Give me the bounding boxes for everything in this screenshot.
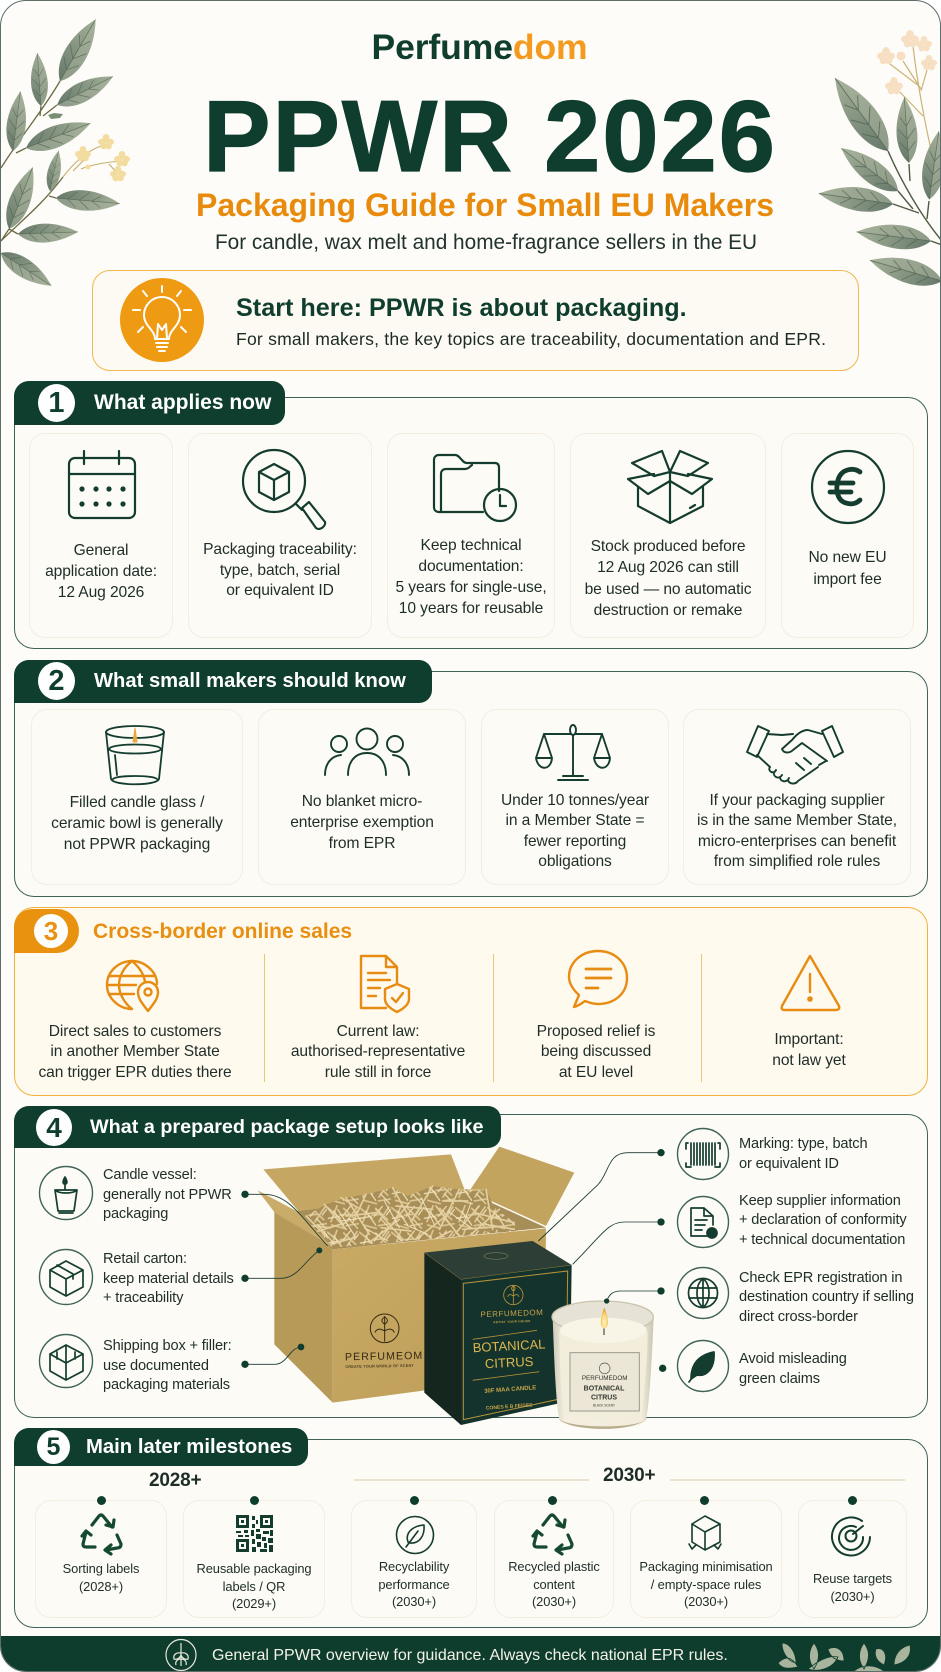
text: proposed relief: at EU level bbox=[559, 1064, 633, 1081]
text: current law bbox=[291, 1023, 465, 1081]
icon: leaf in circle bbox=[396, 1516, 434, 1554]
retail carton: 30F MAA CANDLE bbox=[484, 1385, 536, 1395]
card text: destruction or remake bbox=[594, 602, 742, 619]
card text: Reusable packaging bbox=[196, 1561, 312, 1576]
icon: document check bbox=[677, 1196, 729, 1248]
icon: people bbox=[324, 728, 410, 776]
title: PPWR 2026 bbox=[203, 81, 777, 193]
card text: Filled candle glass / bbox=[70, 794, 204, 811]
card text: No new EU bbox=[809, 549, 886, 566]
text: green claims bbox=[739, 1350, 847, 1389]
label 2028+: 2028+ bbox=[149, 1470, 201, 1491]
icon: document with shield bbox=[360, 954, 410, 1014]
heading text: What small makers should know bbox=[94, 670, 406, 692]
panel 5: later milestones bbox=[14, 1428, 928, 1628]
text: proposed relief bbox=[537, 1023, 655, 1081]
card text: (2030+) bbox=[830, 1589, 875, 1604]
section heading 3 bbox=[14, 909, 79, 953]
product photo: box, carton, candle and leader lines bbox=[241, 1146, 666, 1429]
retail carton: BOTANICAL bbox=[472, 1336, 546, 1355]
shipping box bbox=[258, 1147, 574, 1403]
card text: (2028+) bbox=[79, 1579, 123, 1594]
retail carton: ARTIST YOUR HOUSE bbox=[493, 1319, 531, 1324]
card text bbox=[290, 793, 434, 852]
text: EPR registration bbox=[739, 1269, 914, 1327]
icon: euro bbox=[810, 450, 886, 524]
icon: candle glass bbox=[105, 725, 165, 786]
text: current law: rule still in force bbox=[325, 1064, 431, 1081]
card text bbox=[697, 792, 897, 870]
retail carton: CITRUS bbox=[485, 1354, 534, 1371]
card text: is in the same Member State, bbox=[697, 812, 897, 829]
text: direct sales: in another Member State bbox=[50, 1043, 220, 1060]
card text: Recycled plastic bbox=[508, 1559, 600, 1574]
retail carton: PERFUMEDOM bbox=[480, 1308, 543, 1319]
card text: (2029+) bbox=[232, 1596, 276, 1611]
card text bbox=[45, 542, 157, 601]
text: supplier information: Keep supplier information bbox=[739, 1193, 901, 1209]
card: existing stock bbox=[570, 433, 766, 638]
icon: globe with pin bbox=[106, 960, 160, 1012]
card text: (2030+) bbox=[392, 1594, 436, 1609]
label 2030+ with rule: 2030+ bbox=[603, 1465, 655, 1486]
icon: QR code bbox=[236, 1515, 273, 1552]
card text: ceramic bowl is generally bbox=[51, 815, 223, 832]
card text: Stock produced before bbox=[591, 538, 745, 555]
text: proposed relief: being discussed bbox=[541, 1043, 651, 1060]
text: candle vessel: Candle vessel: bbox=[103, 1167, 197, 1183]
footer bar bbox=[1, 1636, 941, 1672]
icon: target bbox=[832, 1514, 873, 1556]
card text bbox=[51, 794, 223, 853]
text: green claims: green claims bbox=[739, 1370, 820, 1386]
shipping box: PERFUMEOM bbox=[345, 1350, 423, 1363]
icon: leaf bbox=[677, 1340, 729, 1392]
card: under 10 tonnes bbox=[481, 709, 669, 885]
card text bbox=[184, 1560, 324, 1613]
icon: folder with clock bbox=[432, 454, 518, 522]
retail carton: CONES E B FEISES bbox=[486, 1402, 533, 1412]
text: important: not law yet bbox=[772, 1052, 846, 1069]
text: marking bbox=[739, 1135, 867, 1174]
card text: import fee bbox=[813, 571, 882, 588]
icon: barcode bbox=[677, 1128, 729, 1180]
card: candle glass bbox=[31, 709, 243, 885]
icon: retail carton bbox=[38, 1248, 94, 1306]
icon: warning triangle bbox=[780, 954, 840, 1012]
icon: recycling arrows bbox=[82, 1514, 123, 1554]
text: EPR registration: Check EPR registration in bbox=[739, 1270, 902, 1286]
text: shipping box: Shipping box + filler: bbox=[103, 1338, 232, 1354]
text: direct sales: can trigger EPR duties there bbox=[38, 1064, 232, 1081]
icon: candle vessel bbox=[38, 1166, 94, 1220]
card text: from EPR bbox=[329, 835, 395, 852]
card text: in a Member State = bbox=[506, 812, 644, 829]
icon: light bulb bbox=[120, 278, 204, 362]
text: shipping box bbox=[103, 1338, 232, 1393]
number 3: 3 bbox=[44, 916, 58, 946]
number 3 bbox=[34, 914, 68, 948]
card text: content bbox=[533, 1577, 575, 1592]
card text bbox=[395, 537, 547, 617]
text: current law: Current law: bbox=[337, 1023, 419, 1040]
card text: be used — no automatic bbox=[585, 581, 751, 598]
icon: shipping box bbox=[38, 1334, 94, 1388]
decoration: leaves top left bbox=[1, 19, 130, 286]
card text: performance bbox=[378, 1577, 450, 1592]
card text bbox=[501, 792, 649, 870]
leader lines bbox=[245, 1153, 661, 1364]
panel 3: cross-border online sales bbox=[14, 907, 928, 1096]
text: shipping box: packaging materials bbox=[103, 1377, 230, 1393]
text: supplier information: + declaration of conformity bbox=[739, 1212, 907, 1228]
decoration: leaves and flowers top right bbox=[818, 30, 940, 286]
card text: General bbox=[74, 542, 128, 559]
number 2 bbox=[38, 662, 75, 700]
card: reuse targets bbox=[798, 1500, 907, 1618]
section heading 5 bbox=[14, 1428, 308, 1466]
panel 1: what applies now bbox=[14, 381, 928, 649]
card text bbox=[352, 1558, 476, 1611]
text: current law: authorised-representative bbox=[291, 1043, 465, 1060]
card text: fewer reporting bbox=[524, 833, 626, 850]
heading text: Main later milestones bbox=[86, 1436, 292, 1458]
candle: CITRUS bbox=[591, 1394, 617, 1401]
number 4: 4 bbox=[46, 1112, 62, 1143]
card text bbox=[585, 538, 752, 619]
card text bbox=[631, 1558, 781, 1611]
text: proposed relief: Proposed relief is bbox=[537, 1023, 655, 1040]
icon: magnifier with box bbox=[242, 448, 326, 530]
candle: BLACK SCENT bbox=[593, 1403, 615, 1407]
card: sorting labels bbox=[35, 1500, 167, 1618]
callout text: For small makers, the key topics are traceability, documentation and EPR. bbox=[236, 329, 826, 349]
text: direct sales bbox=[38, 1023, 232, 1081]
card text: type, batch, serial bbox=[220, 562, 340, 579]
card text bbox=[799, 1570, 906, 1605]
text: candle vessel: packaging bbox=[103, 1206, 168, 1222]
card text bbox=[36, 1560, 166, 1595]
card: traceability bbox=[188, 433, 372, 638]
retail carton bbox=[424, 1241, 572, 1425]
decoration: footer leaves bbox=[778, 1641, 919, 1672]
card text bbox=[495, 1558, 613, 1611]
card text: Packaging traceability: bbox=[203, 541, 357, 558]
card: simplified roles bbox=[683, 709, 911, 885]
card text: micro-enterprises can benefit bbox=[698, 833, 896, 850]
heading text: What applies now bbox=[94, 391, 271, 414]
card text: 5 years for single-use, bbox=[395, 579, 547, 596]
card: technical documentation bbox=[387, 433, 555, 638]
icon: open box bbox=[626, 450, 714, 524]
card text: (2030+) bbox=[684, 1594, 728, 1609]
card text: not PPWR packaging bbox=[64, 836, 210, 853]
card text: documentation: bbox=[418, 558, 524, 575]
text: direct sales: Direct sales to customers bbox=[49, 1023, 221, 1040]
icon: recycling arrows bbox=[533, 1514, 574, 1554]
card: recycled plastic bbox=[494, 1500, 614, 1618]
heading text: Cross-border online sales bbox=[93, 920, 352, 943]
card text: If your packaging supplier bbox=[709, 792, 885, 809]
footer note: General PPWR overview for guidance. Always check national EPR rules. bbox=[212, 1647, 728, 1664]
card: packaging minimisation bbox=[630, 1500, 782, 1618]
card text: enterprise exemption bbox=[290, 814, 434, 831]
card text: from simplified role rules bbox=[714, 853, 880, 870]
card text: Recyclability bbox=[379, 1559, 449, 1574]
tagline: For candle, wax melt and home-fragrance sellers in the EU bbox=[215, 231, 757, 254]
text: candle vessel: generally not PPWR bbox=[103, 1187, 232, 1203]
card text: Reuse targets bbox=[813, 1571, 892, 1586]
card text: or equivalent ID bbox=[226, 582, 334, 599]
card: application date bbox=[29, 433, 173, 638]
text: retail carton bbox=[103, 1251, 234, 1306]
section heading 4 bbox=[14, 1106, 501, 1148]
card: no exemption bbox=[258, 709, 466, 885]
card text: labels / QR bbox=[223, 1579, 285, 1594]
card: reusable packaging labels bbox=[183, 1500, 325, 1618]
icon: speech bubble bbox=[568, 950, 628, 1008]
candle bbox=[552, 1301, 654, 1429]
text: supplier information bbox=[739, 1192, 907, 1250]
shipping box: CREATE YOUR WORLD OF SCENT bbox=[345, 1364, 414, 1369]
card text: 12 Aug 2026 can still bbox=[597, 559, 739, 576]
text: marking: or equivalent ID bbox=[739, 1156, 839, 1172]
card: recyclability bbox=[351, 1500, 477, 1618]
candle: BOTANICAL bbox=[584, 1386, 625, 1393]
box logo bbox=[370, 1314, 399, 1343]
icon: calendar bbox=[68, 450, 136, 520]
text: supplier information: + technical documentation bbox=[739, 1232, 905, 1248]
callout heading: Start here: PPWR is about packaging. bbox=[236, 294, 687, 322]
icon: globe bbox=[677, 1267, 729, 1319]
card text bbox=[203, 541, 357, 599]
text: retail carton: keep material details bbox=[103, 1271, 234, 1287]
card text bbox=[809, 549, 886, 588]
card text: 12 Aug 2026 bbox=[58, 584, 144, 601]
card text: 10 years for reusable bbox=[399, 600, 543, 617]
card text: obligations bbox=[538, 853, 612, 870]
section heading 1 bbox=[14, 381, 285, 425]
card text: Keep technical bbox=[421, 537, 521, 554]
text: marking: Marking: type, batch bbox=[739, 1136, 867, 1152]
card text: Sorting labels bbox=[63, 1561, 139, 1576]
number 4 bbox=[36, 1109, 72, 1146]
number 1 bbox=[38, 384, 75, 422]
card text: / empty-space rules bbox=[651, 1577, 761, 1592]
text: important: Important: bbox=[774, 1031, 844, 1048]
text: candle vessel bbox=[103, 1167, 232, 1222]
text: important bbox=[772, 1031, 846, 1069]
card text: (2030+) bbox=[532, 1594, 576, 1609]
number 5 bbox=[37, 1430, 70, 1464]
section heading 2 bbox=[14, 660, 432, 703]
heading text: What a prepared package setup looks like bbox=[90, 1116, 484, 1138]
panel 2: what small makers should know bbox=[14, 660, 928, 897]
text: green claims: Avoid misleading bbox=[739, 1351, 847, 1367]
text: shipping box: use documented bbox=[103, 1358, 209, 1374]
panel 4: prepared package setup bbox=[14, 1106, 928, 1429]
candle: PERFUMEDOM bbox=[582, 1375, 628, 1382]
icon: footer logo bbox=[165, 1639, 197, 1671]
icon: handshake bbox=[746, 725, 844, 784]
icon: box with arrows bbox=[687, 1515, 723, 1553]
text: EPR registration: destination country if selling bbox=[739, 1289, 914, 1305]
number 5: 5 bbox=[47, 1433, 60, 1461]
text: retail carton: Retail carton: bbox=[103, 1251, 187, 1267]
brand logo: Perfumedom: Perfumedom bbox=[372, 27, 588, 67]
number 1: 1 bbox=[48, 387, 65, 419]
card text: No blanket micro- bbox=[302, 793, 422, 810]
number 2: 2 bbox=[48, 665, 65, 697]
text: EPR registration: direct cross-border bbox=[739, 1309, 858, 1325]
card text: application date: bbox=[45, 563, 157, 580]
icon: scales bbox=[535, 724, 611, 781]
card text: Packaging minimisation bbox=[639, 1559, 773, 1574]
text: retail carton: + traceability bbox=[103, 1290, 183, 1306]
subtitle: Packaging Guide for Small EU Makers bbox=[196, 187, 774, 223]
card: import fee bbox=[781, 433, 914, 638]
callout: start here bbox=[92, 270, 859, 371]
card text: Under 10 tonnes/year bbox=[501, 792, 649, 809]
